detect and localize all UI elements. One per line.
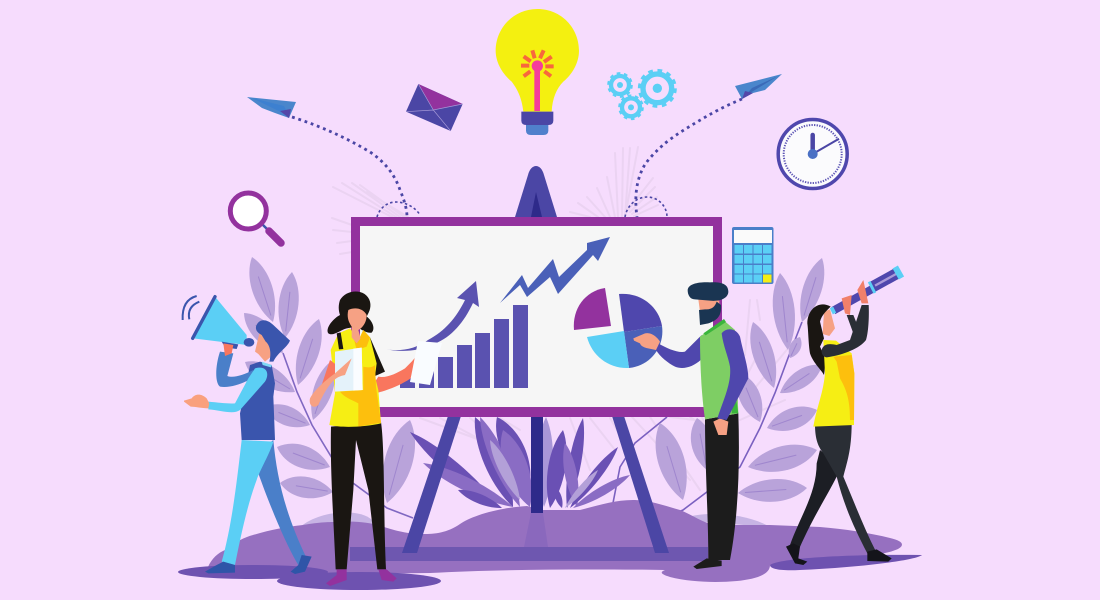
pants (331, 422, 386, 569)
dotted flight path: left (292, 117, 420, 217)
hands (842, 280, 868, 315)
zigzag growth arrow (500, 237, 610, 303)
left forearm (310, 358, 352, 407)
near arm (822, 305, 869, 357)
shirt shading (340, 365, 381, 427)
sound waves (183, 296, 199, 320)
shoes (326, 569, 397, 586)
person: bearded man pointing (633, 282, 748, 569)
near hand (713, 418, 728, 435)
palm fronds behind board (332, 147, 795, 490)
green vest (700, 320, 738, 419)
far arm (847, 315, 859, 333)
strap (337, 332, 343, 349)
icon: clock (778, 120, 847, 188)
megaphone (193, 297, 247, 345)
holding hand (223, 343, 233, 356)
easel right leg (612, 416, 669, 553)
pointing hand (184, 395, 209, 408)
icon: magnifying glass (230, 193, 281, 243)
pointing arm (656, 335, 702, 368)
presentation board (351, 217, 722, 417)
curved growth arrow (384, 281, 479, 351)
bar chart (400, 305, 528, 388)
front arm (208, 368, 267, 412)
right plant (613, 255, 831, 522)
right arm (374, 355, 417, 393)
shadows under people (178, 555, 922, 590)
paper in hand (335, 348, 363, 392)
hair (256, 320, 290, 362)
person: woman with papers (310, 291, 417, 586)
person: woman with telescope (786, 271, 901, 565)
shirt shading (833, 355, 854, 420)
back arm (216, 352, 253, 387)
face (255, 333, 272, 362)
gears (609, 71, 675, 119)
loose paper held over chart (410, 341, 442, 385)
grass blades under board (406, 412, 632, 513)
shirt (329, 328, 381, 427)
near arm (717, 329, 748, 420)
icon: left paper plane (247, 97, 296, 118)
envelope (406, 84, 463, 131)
person: man with megaphone (183, 296, 312, 574)
pie chart (574, 288, 662, 368)
ground band (350, 547, 708, 561)
easel centre post (531, 416, 543, 513)
back leg (258, 440, 307, 565)
easel top (515, 166, 557, 217)
front leg (222, 440, 273, 565)
shoes (786, 543, 892, 565)
beard (699, 302, 721, 325)
icon: right paper plane (735, 74, 782, 99)
easel (402, 166, 669, 553)
front leg (815, 423, 876, 553)
left plant (237, 254, 423, 518)
strap and bag (367, 337, 385, 376)
face (698, 299, 719, 318)
pants (705, 413, 739, 560)
easel left leg (402, 416, 461, 553)
shoe (693, 558, 722, 569)
hair (328, 291, 373, 334)
stem: left plant (283, 353, 413, 518)
back leg (790, 450, 837, 548)
shirt (813, 340, 854, 427)
light leaf humps behind hill (300, 512, 770, 530)
left upper arm (320, 360, 337, 390)
hair (807, 304, 831, 375)
pointing hand (633, 333, 660, 350)
hair (688, 282, 728, 301)
vest (240, 362, 275, 440)
stem: right plant (613, 322, 802, 522)
ground hill (208, 500, 902, 582)
neck and face (348, 308, 367, 343)
shoes (205, 555, 312, 574)
icon: calculator (732, 227, 774, 284)
face (823, 309, 835, 336)
dotted flight path: right (625, 99, 742, 217)
light bulb (496, 9, 579, 135)
telescope (831, 271, 901, 311)
